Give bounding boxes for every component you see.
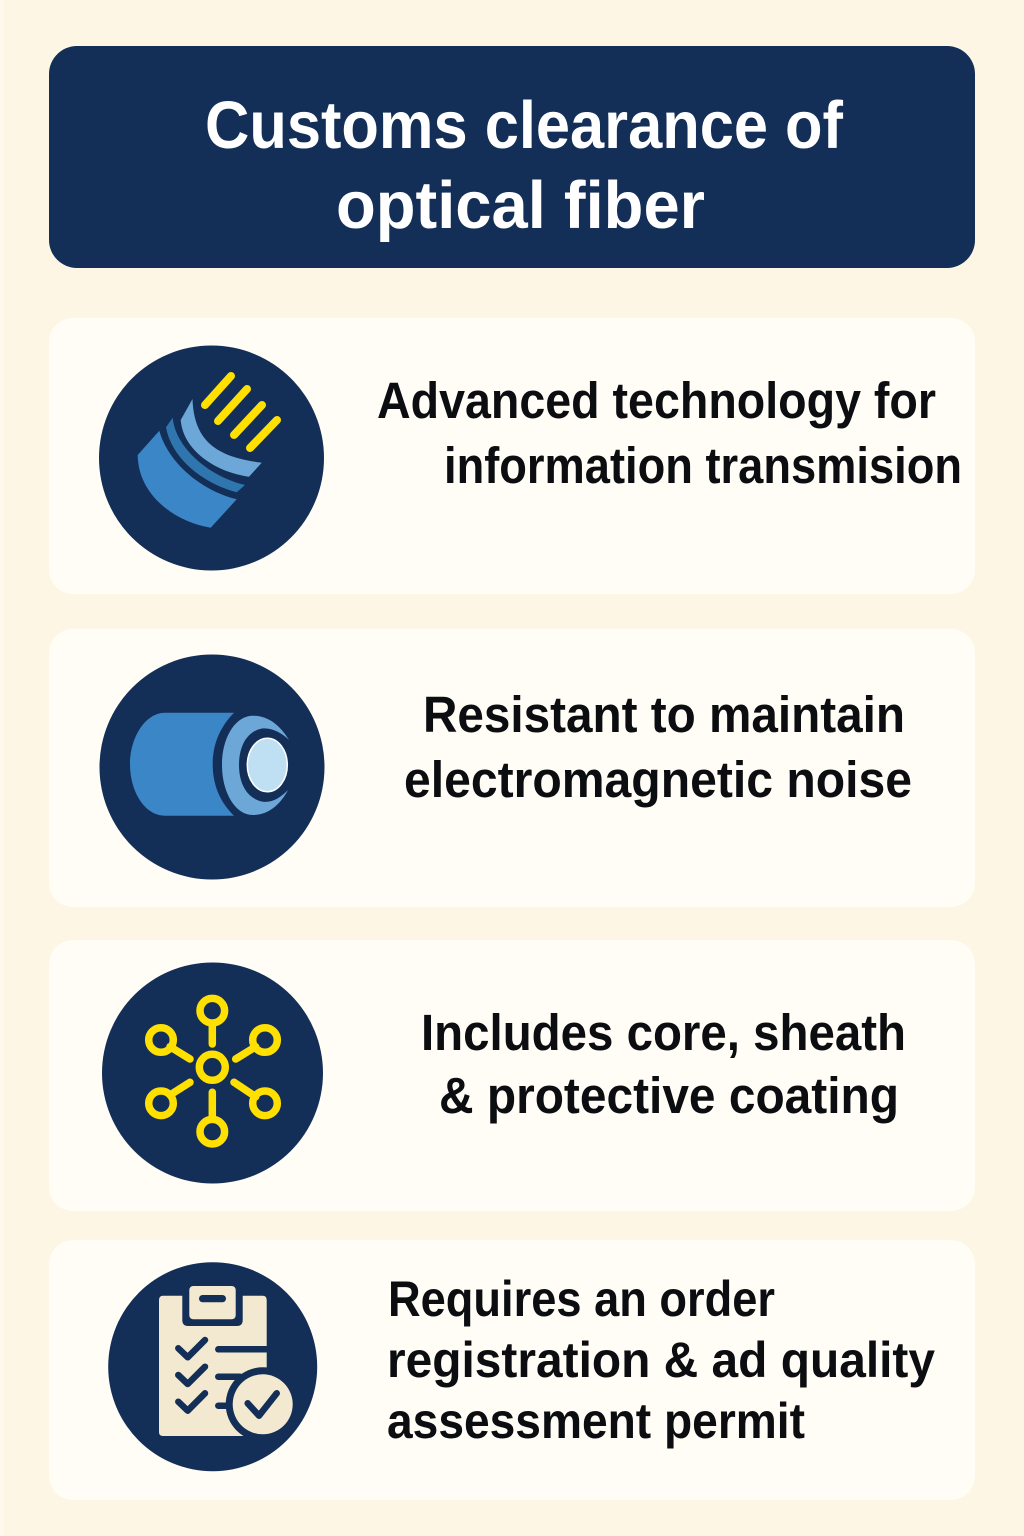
panel: advanced technology [49, 318, 975, 594]
panel: electromagnetic noise [49, 629, 975, 907]
icon: clipboard checklist [108, 1262, 317, 1471]
icon: fiber optic cable [99, 346, 324, 570]
text: electromagnetic noise [404, 686, 912, 808]
icon: cable cross-section [100, 654, 324, 880]
text: electromagnetic noise: Resistant to maintain [423, 686, 905, 743]
text: order registration: assessment permit [387, 1393, 805, 1449]
text: electromagnetic noise: electromagnetic noise [404, 751, 912, 808]
text: core sheath coating: Includes core, sheath [421, 1004, 906, 1061]
text: core sheath coating: & protective coating [439, 1067, 899, 1124]
text: core sheath coating [421, 1004, 906, 1124]
title [205, 88, 844, 243]
text: advanced technology: information transmision [444, 437, 962, 494]
text: advanced technology: Advanced technology for [377, 372, 936, 429]
icon: network nodes [102, 962, 323, 1184]
panel: core sheath coating [49, 940, 975, 1211]
text: advanced technology [377, 372, 962, 494]
text: order registration: registration & ad quality [387, 1332, 935, 1388]
text: order registration [387, 1271, 935, 1449]
panel: order registration [49, 1240, 975, 1500]
title: Customs clearance of [205, 88, 844, 163]
title banner [49, 46, 975, 268]
text: order registration: Requires an order [388, 1271, 775, 1327]
title: optical fiber [336, 168, 705, 243]
